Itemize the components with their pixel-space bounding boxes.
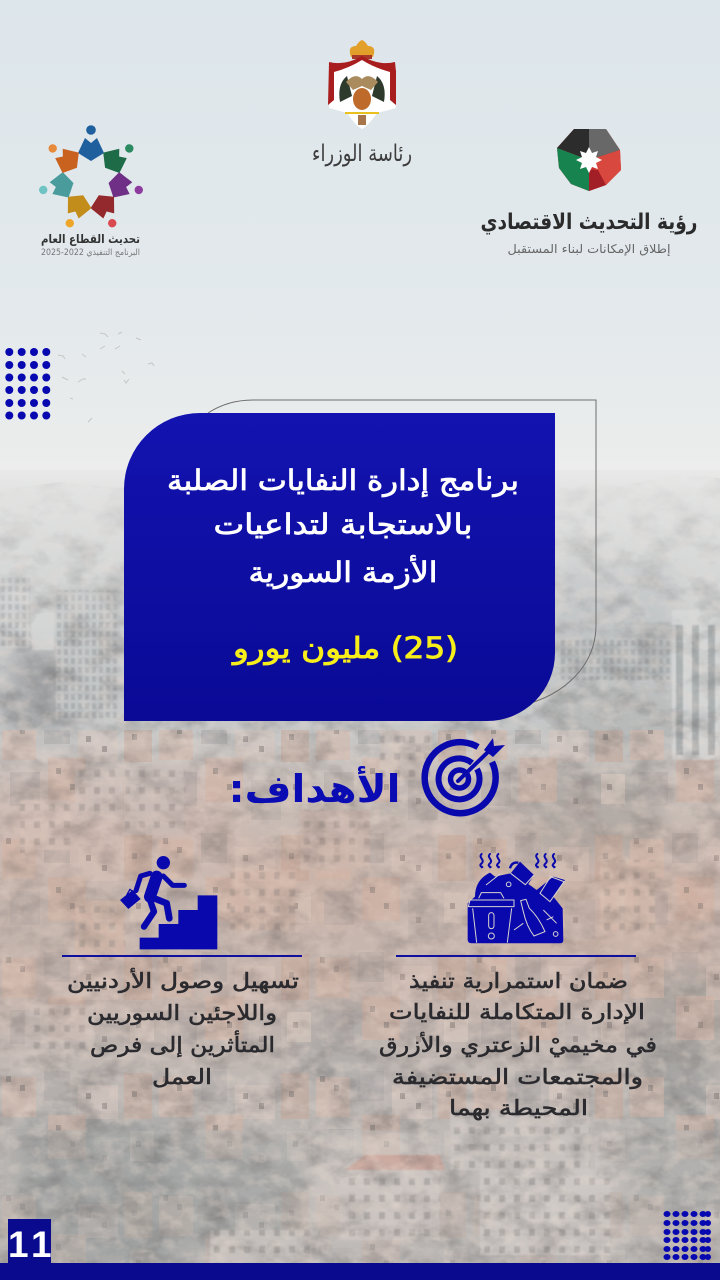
panel outline accent xyxy=(208,400,596,705)
icon: crown xyxy=(350,40,374,59)
dot grid: upper left xyxy=(5,348,50,420)
text block: right objective: ضمان استمرارية تنفيذ xyxy=(409,969,628,993)
prime ministry calligraphy: رئاسة الوزراء xyxy=(312,141,412,167)
text block: left objective xyxy=(67,968,299,1089)
icon: businessman climbing stairs xyxy=(120,856,217,949)
text block: right objective: في مخيميْ الزعتري والأزرق xyxy=(379,1032,657,1057)
logo: Prime Ministry coat of arms xyxy=(312,40,412,167)
programme title line 1: برنامج إدارة النفايات الصلبة xyxy=(167,464,519,497)
tower right xyxy=(672,610,720,760)
icon: waste pile and bin xyxy=(468,854,565,943)
logo: Public Sector Modernisation xyxy=(36,125,146,258)
vision tagline: إطلاق الإمكانات لبناء المستقبل xyxy=(508,242,670,256)
text block: left objective: المتأثرين إلى فرص xyxy=(90,1030,275,1058)
dot grid: lower right xyxy=(664,1211,711,1260)
programme title line 3: الأزمة السورية xyxy=(248,554,438,589)
icon: polygon emblem xyxy=(557,129,621,191)
mid city xyxy=(20,800,70,850)
public sector title: تحديث القطاع العام xyxy=(41,232,140,247)
divider: right objective xyxy=(396,955,636,957)
footer bar xyxy=(0,1263,720,1280)
far towers left xyxy=(0,578,30,648)
text block: left objective: تسهيل وصول الأردنيين xyxy=(67,968,299,993)
icon: shield with mantle xyxy=(328,56,396,129)
page number: 11 xyxy=(8,1224,52,1265)
text block: right objective: والمجتمعات المستضيفة xyxy=(392,1065,643,1089)
programme title line 2: بالاستجابة لتداعيات xyxy=(214,508,472,541)
budget amount: (25) مليون يورو xyxy=(231,631,458,665)
panel: programme title xyxy=(124,413,555,721)
heading: objectives: الأهداف: xyxy=(228,765,400,811)
icon: target with arrow xyxy=(425,738,505,813)
text block: right objective: الإدارة المتكاملة للنفايات xyxy=(389,1000,645,1024)
text block: left objective: العمل xyxy=(152,1065,212,1089)
distant birds xyxy=(58,332,154,422)
logo: Economic Modernisation Vision xyxy=(480,129,698,256)
text block: left objective: واللاجئين السوريين xyxy=(87,1001,277,1025)
icon: seven-figure ring xyxy=(36,125,146,233)
public sector subtitle: البرنامج التنفيذي 2022-2025 xyxy=(41,248,140,258)
near buildings xyxy=(345,1155,445,1170)
divider: left objective xyxy=(62,955,302,957)
text block: right objective: المحيطة بهما xyxy=(449,1096,588,1120)
text block: right objective xyxy=(379,969,657,1120)
